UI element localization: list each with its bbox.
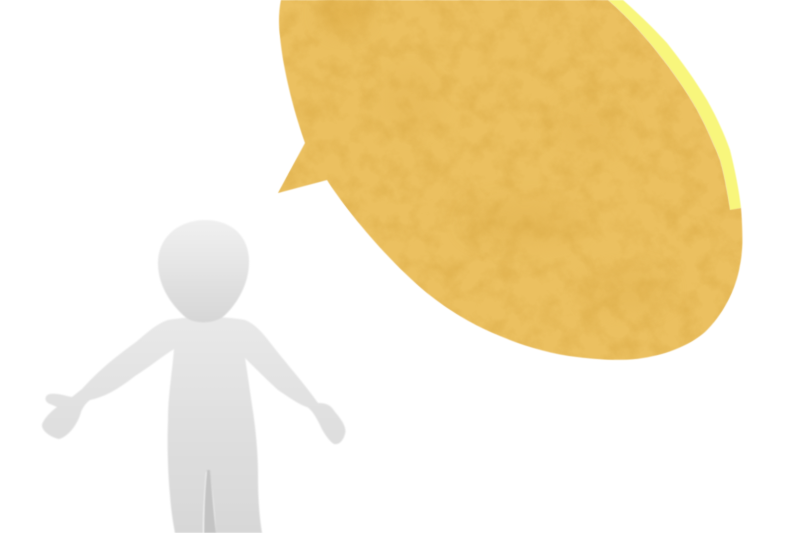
bubble yellow rim [608, 0, 741, 211]
speech bubble [270, 0, 750, 365]
arms, torso and legs [42, 317, 345, 533]
bubble face with tail [278, 0, 742, 360]
head [158, 220, 249, 322]
leg gap shadow [204, 470, 216, 533]
bubble mottled texture [270, 0, 750, 365]
person [42, 220, 345, 533]
